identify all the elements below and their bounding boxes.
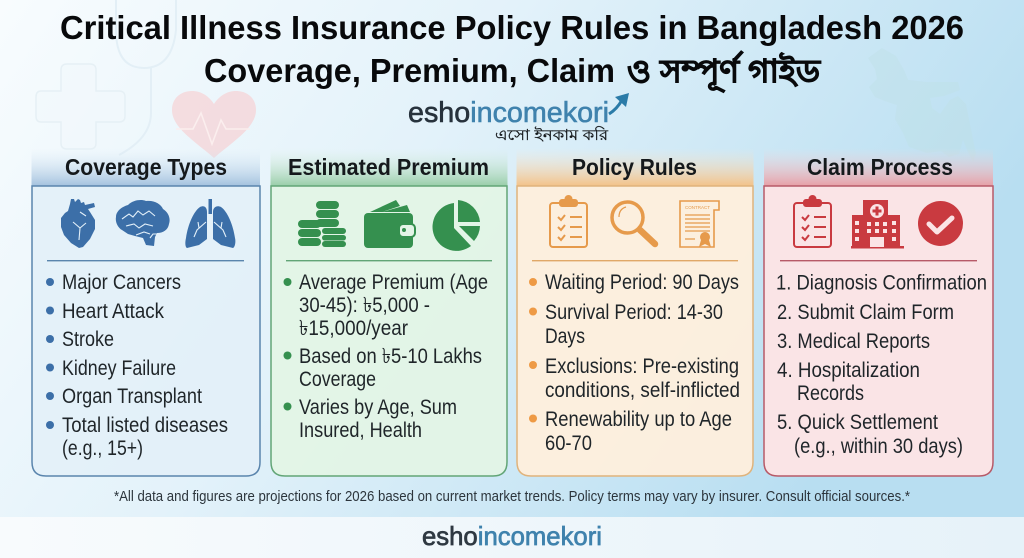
title: Critical Illness Insurance Policy Rules in Bangladesh 2026	[60, 9, 964, 46]
list: claim process: 3. Medical Reports	[777, 330, 930, 353]
list: claim process: 5. Quick Settlement	[777, 411, 938, 434]
list: policy rules	[529, 271, 740, 455]
list: estimated premium: ৳15,000/year	[299, 317, 408, 340]
icon: check mark	[918, 201, 963, 246]
heading: estimated premium: Estimated Premium	[288, 154, 489, 180]
list: coverage types: Organ Transplant	[62, 385, 202, 408]
footnote: *All data and figures are projections for 2026 based on current market trends. Policy terms may vary by insurer. Consult official sources.*	[114, 488, 910, 505]
icon: pie chart	[433, 200, 480, 251]
list: estimated premium: Varies by Age, Sum	[299, 396, 457, 419]
list: estimated premium: 30-45): ৳5,000 -	[299, 294, 430, 317]
list: claim process: 1. Diagnosis Confirmation	[776, 272, 987, 294]
title: Coverage, Premium, Claim	[204, 52, 615, 89]
list: claim process: 2. Submit Claim Form	[777, 301, 954, 324]
title	[60, 9, 964, 93]
icon: contract scroll	[680, 201, 719, 247]
list: coverage types: (e.g., 15+)	[62, 437, 143, 460]
panel: claim process	[764, 148, 993, 476]
list: policy rules: Waiting Period: 90 Days	[545, 271, 739, 294]
icon: contract scroll: CONTRACT	[685, 205, 710, 210]
watermark: stethoscope	[116, 0, 176, 155]
list: estimated premium: Insured, Health	[299, 419, 422, 442]
list: coverage types: Kidney Failure	[62, 357, 176, 380]
panel: estimated premium	[270, 148, 508, 476]
icon: wallet	[364, 200, 415, 248]
icon: brain	[116, 200, 170, 246]
list: estimated premium: Coverage	[299, 368, 376, 391]
heading: claim process: Claim Process	[807, 154, 953, 180]
icon: lungs	[185, 199, 235, 248]
list: coverage types: Total listed diseases	[62, 414, 228, 437]
list: policy rules: Days	[545, 325, 585, 348]
icon: hospital	[851, 200, 904, 248]
watermark: Bangladesh map	[868, 48, 976, 162]
list: estimated premium	[284, 271, 488, 442]
icon: clipboard checklist	[794, 196, 831, 247]
watermark: medical cross	[36, 64, 125, 149]
footer band	[0, 517, 1024, 558]
list: coverage types: Major Cancers	[62, 271, 181, 294]
title: ও সম্পূর্ণ গাইড	[627, 51, 821, 93]
list: policy rules: 60-70	[545, 432, 592, 455]
icon: clipboard checklist	[550, 196, 587, 247]
list: coverage types: Stroke	[62, 328, 114, 351]
icon: coin stacks	[298, 201, 346, 247]
logo: eshoincomekori	[408, 93, 629, 144]
heading: policy rules: Policy Rules	[572, 154, 697, 180]
watermark: heart with pulse	[172, 91, 256, 158]
list: estimated premium: Based on ৳5-10 Lakhs	[299, 345, 482, 368]
list: claim process	[776, 272, 987, 458]
logo: eshoincomekori: eshoincomekori	[408, 97, 609, 129]
list: policy rules: conditions, self-inflicted	[545, 379, 740, 402]
list: claim process: (e.g., within 30 days)	[794, 435, 963, 458]
list: policy rules: Survival Period: 14-30	[545, 301, 723, 324]
list: claim process: Records	[797, 382, 864, 405]
panel: policy rules	[516, 148, 754, 476]
list: estimated premium: Average Premium (Age	[299, 271, 488, 294]
icon: heart organ	[61, 199, 95, 248]
list: coverage types: Heart Attack	[62, 300, 164, 323]
list: policy rules: Exclusions: Pre-existing	[545, 355, 739, 378]
icon: magnifying glass	[612, 202, 655, 244]
list: claim process: 4. Hospitalization	[777, 359, 920, 382]
logo: eshoincomekori: এসো ইনকাম করি	[495, 126, 609, 144]
list: policy rules: Renewability up to Age	[545, 408, 732, 431]
list: coverage types	[46, 271, 228, 460]
heading: coverage types: Coverage Types	[65, 154, 227, 180]
panel: coverage types	[32, 148, 260, 476]
footer logo: eshoincomekori	[422, 521, 602, 551]
